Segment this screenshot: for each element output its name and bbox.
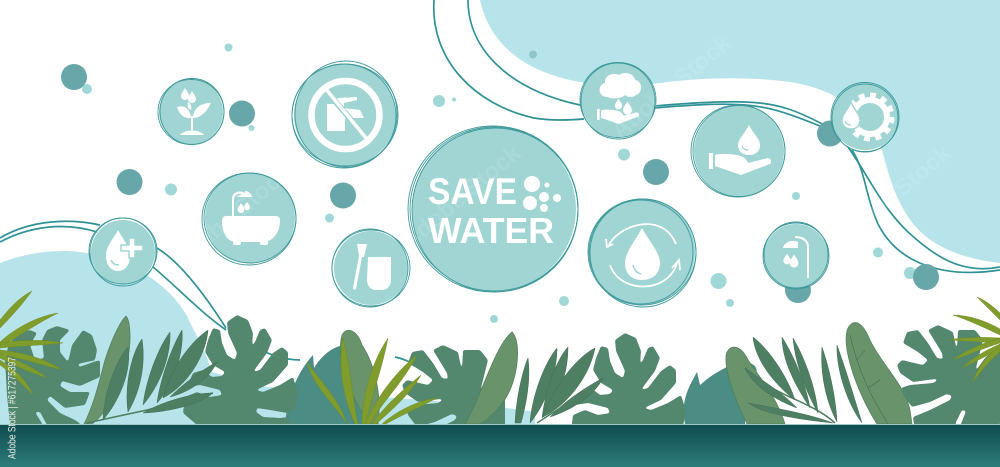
monstera leaf 2 bbox=[183, 315, 298, 425]
olive leaf 3 bbox=[465, 332, 518, 424]
icon: bathtub bbox=[202, 173, 296, 265]
teal leaf 1 bbox=[285, 345, 370, 425]
teal leaf 2 bbox=[684, 363, 757, 424]
watermark stamps: Adobe Stock bbox=[827, 139, 957, 255]
right yellow-green palm bbox=[948, 297, 1000, 382]
heading: SAVE: SAVE bbox=[428, 171, 517, 212]
bottom band bbox=[0, 424, 1000, 467]
watermark stamps: Adobe Stock bbox=[167, 159, 297, 275]
background blob: bottom left bbox=[0, 251, 535, 425]
icon: rain in hand bbox=[580, 62, 656, 139]
icon: no running tap bbox=[292, 61, 398, 168]
watermark id vertical text: Adobe Stock | #617275397 bbox=[6, 357, 18, 459]
icon: drop and gear bbox=[831, 82, 899, 152]
olive leaf 4 bbox=[726, 347, 785, 424]
monstera leaf 1 bbox=[5, 326, 100, 425]
palm frond 2 bbox=[515, 347, 603, 423]
monstera leaf 5 bbox=[897, 325, 1000, 425]
olive leaf 2 bbox=[340, 330, 379, 424]
icon: toothbrush and cup bbox=[332, 229, 410, 307]
palm frond 3 bbox=[745, 337, 862, 423]
icon: plant bbox=[158, 78, 224, 144]
connecting lines: top bbox=[434, 0, 1000, 272]
icon: bubbles bbox=[523, 176, 561, 212]
background blob: top right bbox=[480, 0, 1000, 263]
decorative dots bbox=[61, 44, 939, 323]
icon: hand holding drop bbox=[691, 105, 785, 197]
olive leaf 5 bbox=[846, 322, 912, 424]
watermark stamps: Adobe Stock bbox=[397, 139, 527, 255]
icon: shower bbox=[763, 222, 829, 289]
olive leaf 1 bbox=[84, 316, 130, 424]
connecting lines: left bbox=[0, 221, 432, 378]
palm frond 1 bbox=[87, 330, 217, 423]
watermark stamps: Adobe Stock bbox=[607, 29, 737, 145]
heading: WATER: WATER bbox=[428, 210, 554, 251]
foliage bbox=[0, 291, 1000, 445]
left yellow-green palm bbox=[0, 291, 63, 395]
main badge: save water bbox=[408, 126, 578, 292]
yellow-green grass blades bbox=[307, 338, 437, 424]
watermark stamps bbox=[167, 29, 957, 275]
monstera leaf 4 bbox=[571, 333, 686, 443]
icon: water cycle bbox=[588, 199, 696, 307]
icon: drop plus bbox=[89, 218, 157, 286]
monstera leaf 3 bbox=[402, 345, 505, 445]
